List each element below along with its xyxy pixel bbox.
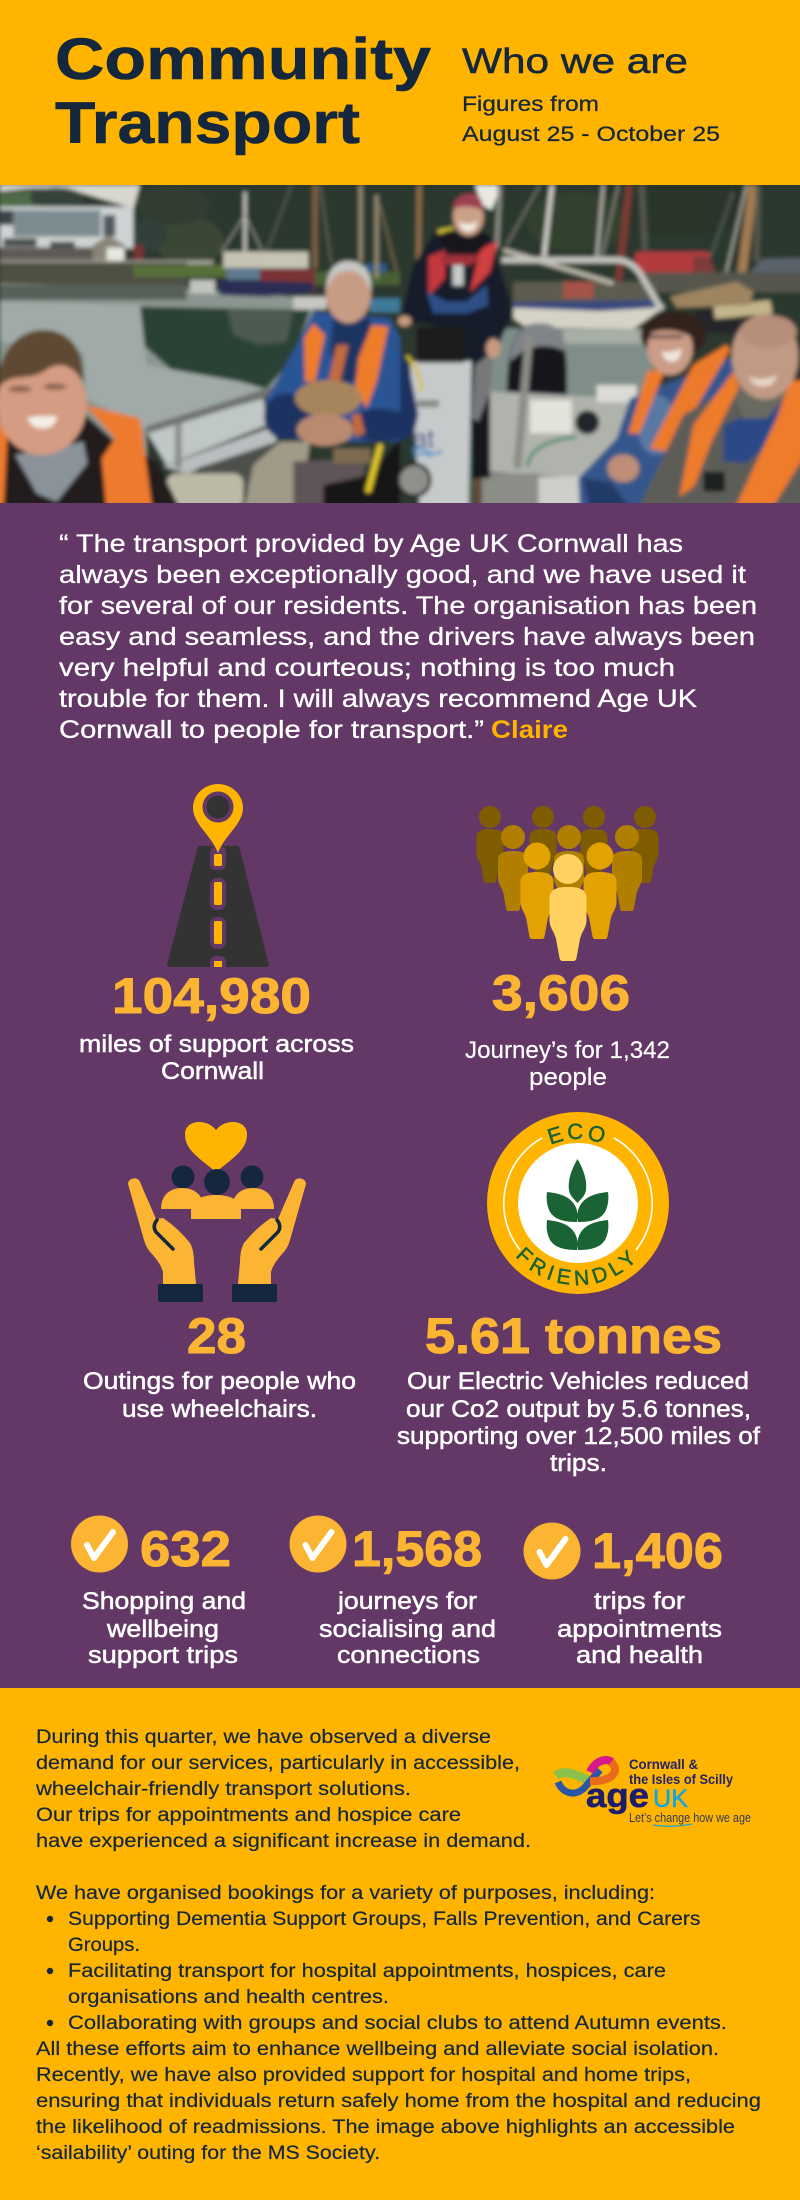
logo: Age UK Cornwall: Cornwall &: [629, 1756, 698, 1772]
text: closing paragraph: ‘sailability’ outing for the MS Society.: [36, 2143, 380, 2164]
testimonial quote: always been exceptionally good, and we have used it: [59, 561, 746, 589]
logo: Age UK Cornwall: [556, 1756, 751, 1826]
stat: journeys: people: [529, 1064, 607, 1091]
standing skipper: [400, 230, 513, 363]
stat: journeys: [465, 965, 670, 1091]
text: intro paragraph: wheelchair-friendly transport solutions.: [35, 1779, 411, 1800]
stat: carbon saved: 5.61 tonnes: [425, 1308, 722, 1364]
icon: check: [524, 1522, 580, 1580]
icon: eco friendly badge: ECO: [547, 1123, 605, 1144]
text: closing paragraph: [36, 2039, 761, 2164]
stat: journeys: Journey’s for 1,342: [465, 1037, 670, 1064]
testimonial quote: [59, 530, 757, 744]
harbour water: [0, 280, 316, 459]
man in wheelchair: [265, 312, 400, 442]
stat: shopping trips: support trips: [88, 1642, 238, 1669]
stat: outings: use wheelchairs.: [122, 1396, 317, 1423]
title: [55, 27, 431, 156]
panel: purple body: [0, 503, 800, 1688]
outboard motor: [507, 323, 567, 395]
text: closing paragraph: All these efforts aim to enhance wellbeing and alleviate social isolation.: [36, 2039, 719, 2060]
list: purposes: [47, 1909, 727, 2034]
stat: miles: 104,980: [112, 968, 311, 1024]
text: intro paragraph: During this quarter, we have observed a diverse: [36, 1727, 491, 1748]
date range: [462, 93, 720, 146]
text: intro paragraph: [35, 1727, 531, 1852]
stat: miles: miles of support across: [79, 1031, 354, 1058]
icon: check: [71, 1516, 128, 1572]
stat: carbon saved: trips.: [550, 1450, 607, 1477]
stat: journeys: 3,606: [492, 965, 630, 1021]
list: purposes: Groups.: [68, 1935, 140, 1956]
testimonial quote: Cornwall to people for transport.”: [59, 716, 484, 744]
stat: shopping trips: Shopping and: [82, 1588, 246, 1615]
stat: socialising journeys: [290, 1516, 496, 1669]
icon: eco friendly badge: [487, 1112, 669, 1294]
stat: carbon saved: [397, 1308, 760, 1477]
sailing boats behind: [513, 282, 657, 303]
stat: carbon saved: our Co2 output by 5.6 tonnes,: [406, 1396, 751, 1423]
text: closing paragraph: ensuring that individuals return safely home from the hospital and reducing: [36, 2091, 761, 2112]
stat: carbon saved: supporting over 12,500 miles of: [397, 1423, 760, 1450]
text: intro paragraph: demand for our services, particularly in accessible,: [36, 1753, 520, 1774]
text: closing paragraph: Recently, we have also provided support for hospital and home trips,: [36, 2065, 691, 2086]
testimonial quote: trouble for them. I will always recommend Age UK: [59, 685, 697, 713]
stat: miles: Cornwall: [161, 1058, 264, 1085]
list: purposes: Facilitating transport for hospital appointments, hospices, care: [68, 1961, 666, 1982]
logo: Age UK Cornwall: Let’s change how we age: [629, 1810, 751, 1825]
photo: group on accessible boat: at: [413, 423, 435, 453]
stat: shopping trips: [71, 1516, 246, 1669]
boat interior: [487, 392, 633, 482]
text: intro paragraph: Our trips for appointments and hospice care: [36, 1805, 461, 1826]
text: bookings heading: We have organised bookings for a variety of purposes, including:: [36, 1883, 655, 1904]
logo: Age UK Cornwall: UK: [653, 1785, 688, 1813]
date range: August 25 - October 25: [462, 123, 720, 146]
stat: appointment trips: trips for: [594, 1588, 685, 1615]
woman at left: [0, 414, 180, 503]
woman in glasses: [578, 357, 737, 512]
moored boats: [190, 280, 215, 293]
boat rail and gunwale: [163, 427, 277, 473]
stat: socialising journeys: 1,568: [352, 1521, 482, 1577]
subtitle: Who we are: [462, 42, 688, 81]
water behind console: [490, 328, 653, 398]
stat: socialising journeys: connections: [337, 1642, 480, 1669]
list: purposes: Collaborating with groups and social clubs to attend Autumn events.: [68, 2013, 727, 2034]
title: Transport: [55, 91, 360, 156]
icon: crowd of people: [476, 806, 658, 961]
icon: eco friendly badge: FRIENDLY: [516, 1246, 634, 1286]
boat rail: [503, 250, 613, 283]
testimonial quote: very helpful and courteous; nothing is too much: [59, 654, 675, 682]
stat: appointment trips: and health: [576, 1642, 703, 1669]
icon: check: [290, 1516, 346, 1572]
date range: Figures from: [462, 93, 599, 116]
testimonial quote: “ The transport provided by Age UK Cornwall has: [59, 530, 683, 558]
stat: shopping trips: wellbeing: [106, 1616, 219, 1643]
icon: hands holding people and heart: [128, 1122, 306, 1302]
header panel: [0, 0, 800, 186]
stat: carbon saved: Our Electric Vehicles reduced: [407, 1368, 749, 1395]
icon: road with location pin: [167, 784, 269, 967]
stat: shopping trips: 632: [140, 1521, 231, 1577]
stat: appointment trips: [524, 1522, 723, 1669]
testimonial quote: for several of our residents. The organisation has been: [59, 592, 757, 620]
stat: socialising journeys: socialising and: [319, 1616, 496, 1643]
stat: outings: 28: [187, 1308, 246, 1364]
stat: outings: [83, 1308, 356, 1423]
stat: outings: Outings for people who: [83, 1368, 356, 1395]
panel: summary: [0, 1688, 800, 2200]
testimonial quote: easy and seamless, and the drivers have always been: [59, 623, 755, 651]
stat: appointment trips: 1,406: [592, 1523, 723, 1579]
helm console: [410, 361, 472, 512]
logo: Age UK Cornwall: age: [586, 1777, 649, 1815]
stat: miles: [79, 968, 354, 1085]
man at right: [637, 385, 800, 512]
testimonial quote: Claire: [491, 716, 568, 744]
text: closing paragraph: the likelihood of readmissions. The image above highlights an accessible: [36, 2117, 735, 2138]
stat: socialising journeys: journeys for: [337, 1588, 477, 1615]
photo: group on accessible boat: [0, 175, 800, 515]
list: purposes: Supporting Dementia Support Groups, Falls Prevention, and Carers: [68, 1909, 700, 1930]
text: intro paragraph: have experienced a significant increase in demand.: [36, 1831, 531, 1852]
stat: appointment trips: appointments: [557, 1616, 722, 1643]
logo: Age UK Cornwall: the Isles of Scilly: [629, 1771, 733, 1787]
list: purposes: organisations and health centres.: [68, 1987, 389, 2008]
title: Community: [55, 27, 431, 92]
